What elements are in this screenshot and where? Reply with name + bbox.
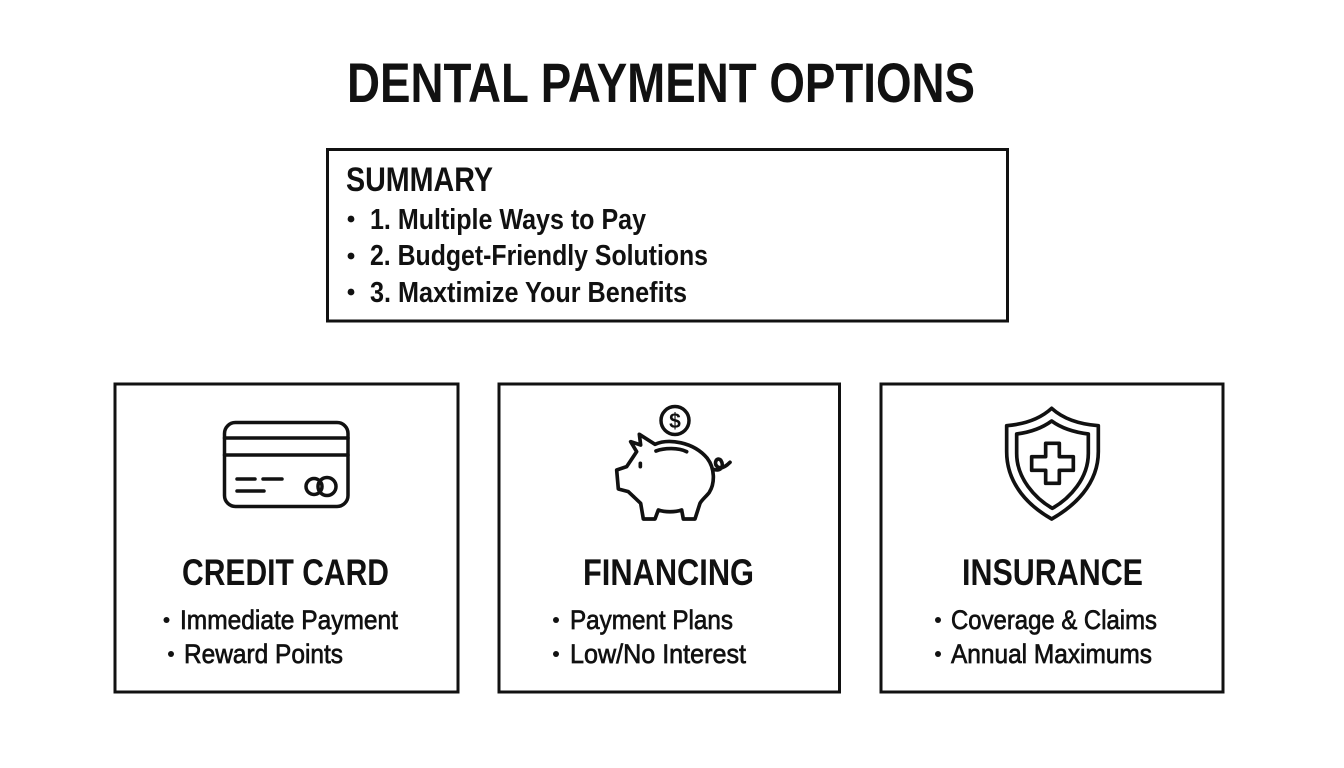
insurance heading: INSURANCE [962,552,1143,593]
financing heading: FINANCING [583,552,754,593]
panel: summary [328,150,1008,321]
financing item 2: Low/No Interest [570,639,746,669]
credit card heading: CREDIT CARD [182,552,389,593]
panel: insurance [881,384,1223,692]
icon: shield [1007,408,1098,519]
panel: financing [499,384,840,692]
icon: credit card [224,422,348,506]
credit card item 2: Reward Points [184,639,343,669]
summary item 2: 2. Budget-Friendly Solutions [370,240,708,272]
icon: pig [617,434,730,519]
summary heading: SUMMARY [346,161,493,199]
panel: credit card [115,384,458,692]
insurance item 2: Annual Maximums [951,639,1152,669]
insurance item 1: Coverage & Claims [951,605,1157,635]
title: DENTAL PAYMENT OPTIONS [347,51,975,114]
summary item 1: 1. Multiple Ways to Pay [370,204,646,236]
financing item 1: Payment Plans [570,605,733,635]
icon: coin: $ [669,410,681,433]
summary item 3: 3. Maxtimize Your Benefits [370,277,687,309]
credit card item 1: Immediate Payment [180,605,398,635]
icon: piggy bank [617,406,730,519]
